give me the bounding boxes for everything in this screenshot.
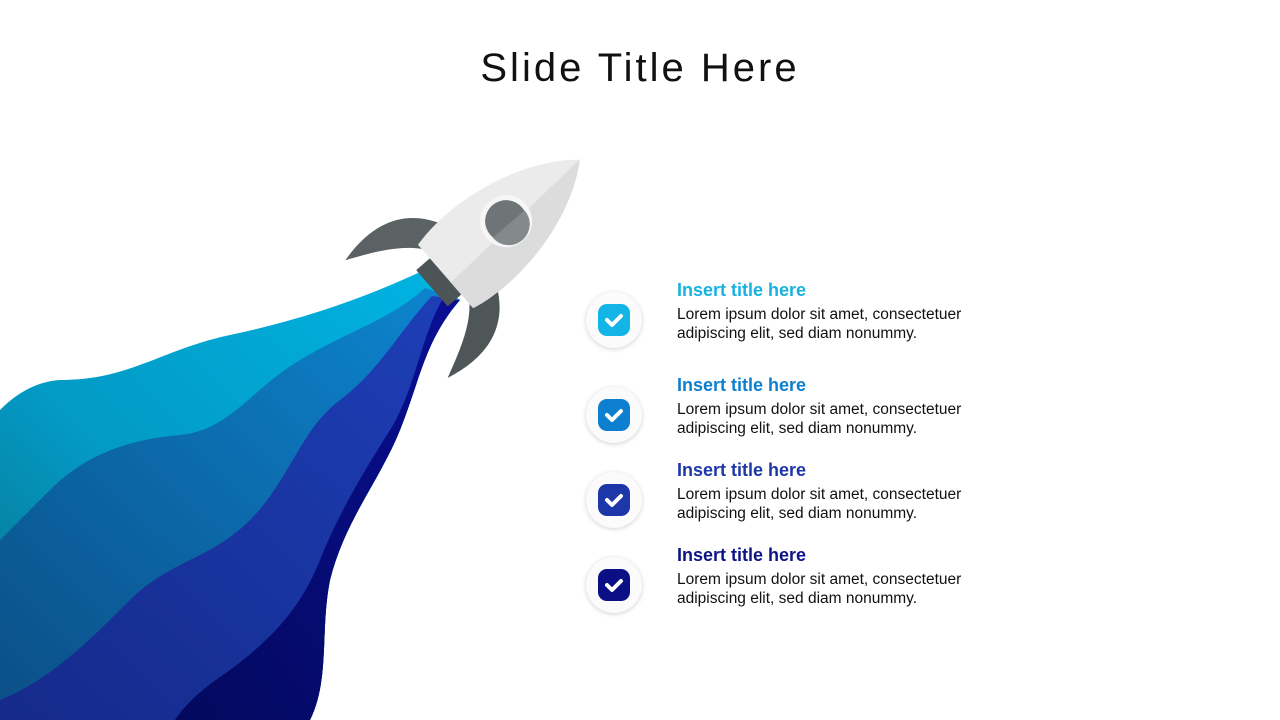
item 1: [584, 280, 962, 351]
item 4: Lorem ipsum dolor sit amet, consectetuer: [677, 571, 961, 588]
item 2: Insert title here: [677, 375, 806, 395]
item 1: Lorem ipsum dolor sit amet, consectetuer: [677, 306, 961, 323]
title: Slide Title Here: [480, 46, 800, 90]
rocket: [343, 98, 634, 381]
exhaust streams: [0, 272, 460, 720]
item 4: adipiscing elit, sed diam nonummy.: [677, 590, 917, 607]
item 2: adipiscing elit, sed diam nonummy.: [677, 420, 917, 437]
item 2: Lorem ipsum dolor sit amet, consectetuer: [677, 401, 961, 418]
item 1: Insert title here: [677, 280, 806, 300]
item 1: adipiscing elit, sed diam nonummy.: [677, 325, 917, 342]
item 4: Insert title here: [677, 545, 806, 565]
item 3: adipiscing elit, sed diam nonummy.: [677, 505, 917, 522]
item 3: [584, 460, 962, 531]
item 3: Lorem ipsum dolor sit amet, consectetuer: [677, 486, 961, 503]
item 2: [584, 375, 962, 446]
item 3: Insert title here: [677, 460, 806, 480]
item 4: [584, 545, 962, 616]
